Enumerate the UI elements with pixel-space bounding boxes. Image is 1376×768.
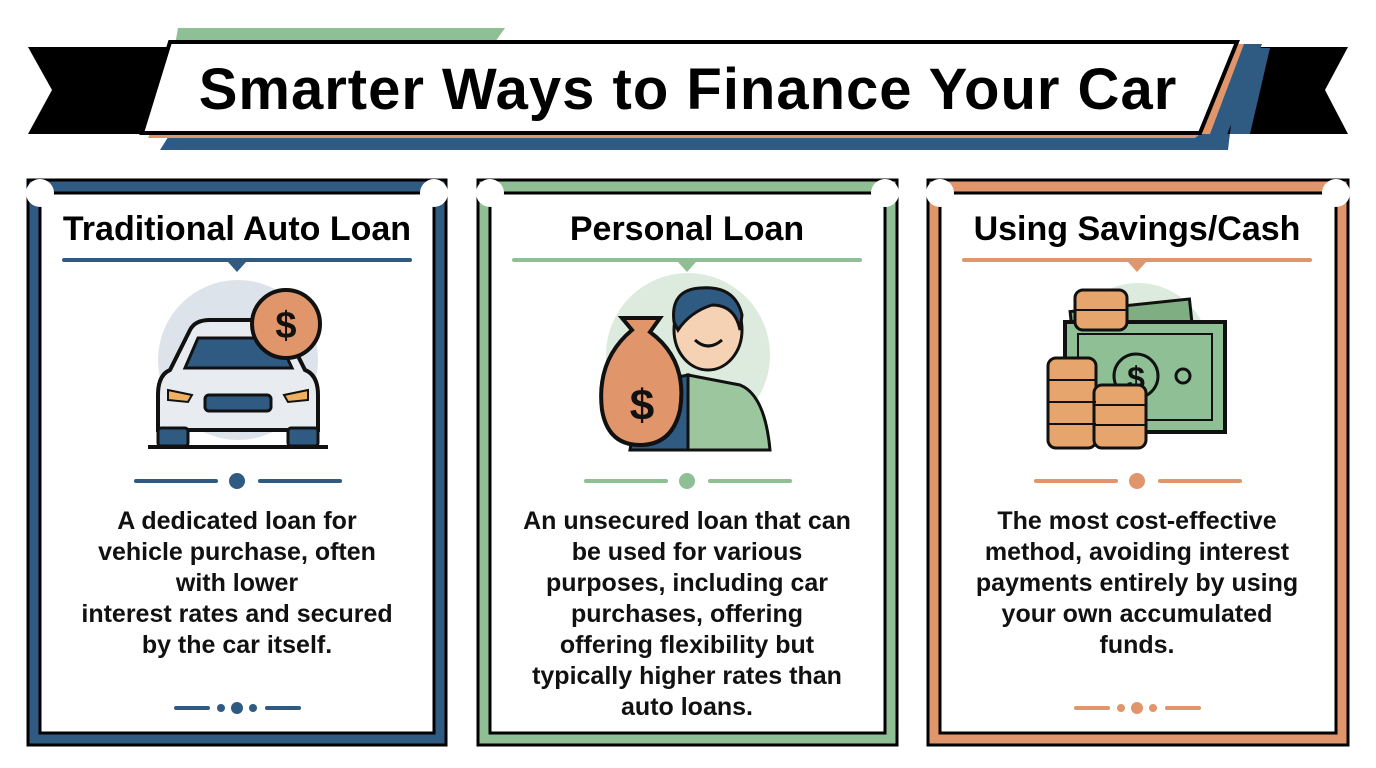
panel: savings/cash bbox=[926, 179, 1350, 745]
text block: method, avoiding interest bbox=[985, 538, 1290, 566]
text block: typically higher rates than bbox=[532, 662, 842, 690]
text block: be used for various bbox=[572, 538, 802, 566]
icon: cash and coins: $ bbox=[1127, 360, 1145, 396]
heading: Using Savings/Cash bbox=[974, 210, 1300, 248]
text block: payments entirely by using bbox=[976, 569, 1298, 597]
text block: auto loans. bbox=[621, 693, 753, 721]
text block: vehicle purchase, often bbox=[98, 538, 376, 566]
heading: Traditional Auto Loan bbox=[63, 210, 411, 248]
title: Smarter Ways to Finance Your Car bbox=[199, 57, 1177, 122]
title banner bbox=[28, 28, 1348, 150]
text block: interest rates and secured bbox=[81, 600, 393, 628]
icon: person with money bag bbox=[601, 273, 770, 450]
text block: purposes, including car bbox=[546, 569, 828, 597]
text block: A dedicated loan for bbox=[117, 507, 357, 535]
icon: person with money bag: $ bbox=[630, 381, 654, 430]
panel: personal loan bbox=[476, 179, 899, 745]
panel: traditional auto loan bbox=[26, 179, 448, 745]
text block: offering flexibility but bbox=[560, 631, 815, 659]
text block: The most cost-effective bbox=[997, 507, 1277, 535]
heading: Personal Loan bbox=[570, 210, 804, 248]
text block: your own accumulated bbox=[1002, 600, 1272, 628]
text block: by the car itself. bbox=[142, 631, 332, 659]
icon: car with dollar: $ bbox=[275, 305, 297, 347]
text block: funds. bbox=[1100, 631, 1174, 659]
text block: with lower bbox=[175, 569, 298, 597]
icon: cash and coins bbox=[1048, 283, 1225, 448]
text block: An unsecured loan that can bbox=[523, 507, 851, 535]
text block: purchases, offering bbox=[571, 600, 803, 628]
icon: car with dollar bbox=[148, 280, 328, 449]
